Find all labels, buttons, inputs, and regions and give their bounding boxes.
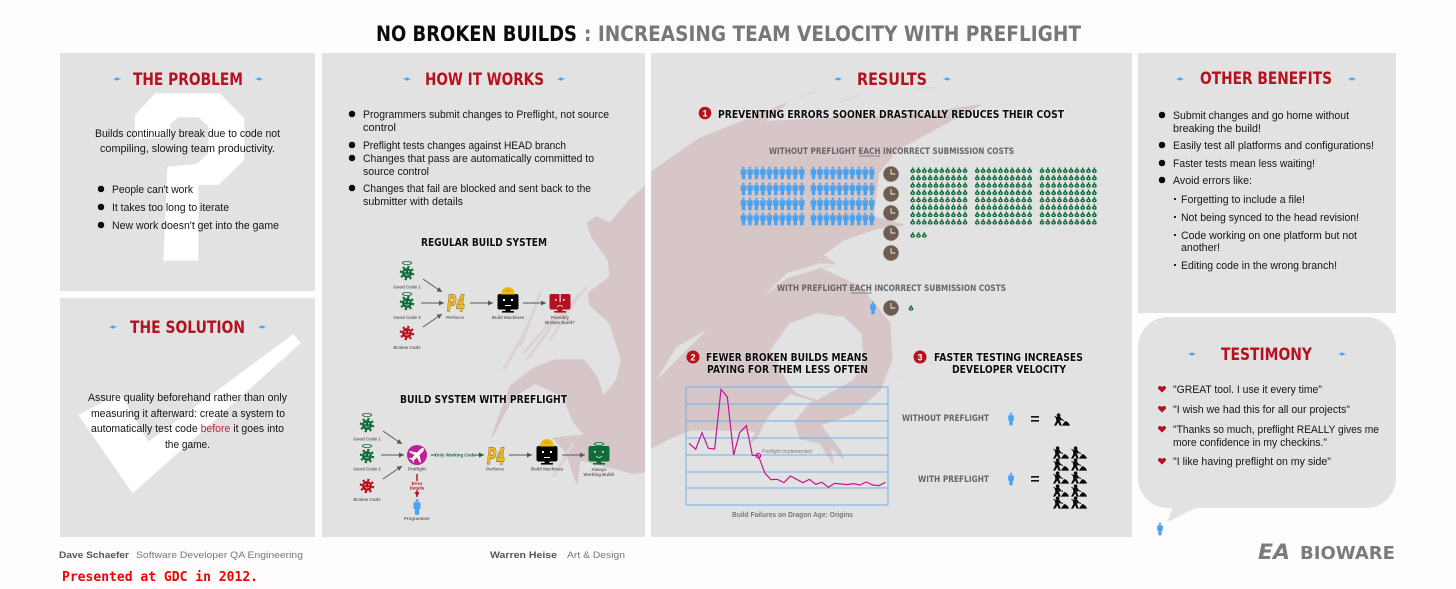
section 3 heading: [914, 350, 1083, 376]
heading: other benefits: OTHER BENEFITS: [1200, 69, 1332, 89]
dragon artwork, main body: [651, 87, 980, 464]
diagram: regular build system: Broken Code: [393, 345, 421, 350]
diagram: regular build system: Good Code 2: [393, 315, 421, 320]
panel: testimony speech bubble: [1138, 317, 1396, 535]
diagram: regular build system: P4: [447, 292, 465, 317]
text block: solution description: Assure quality beforehand rather than only: [88, 392, 287, 404]
text block: problem description: compiling, slowing team productivity.: [100, 143, 275, 155]
title: : INCREASING TEAM VELOCITY WITH PREFLIGHT: [584, 22, 1082, 46]
credit: Warren Heise: Warren Heise: [490, 550, 557, 561]
text block: solution description: measuring it afterward: create a system to: [91, 408, 285, 420]
icon: person speaking: [1157, 523, 1163, 535]
diagram: build system with preflight: Build Machines: [531, 466, 564, 472]
heading: testimony: TESTIMONY: [1221, 345, 1313, 365]
list: quotes: [1158, 384, 1379, 468]
list: quotes: "I wish we had this for all our projects": [1173, 404, 1350, 416]
list: problem effects: [98, 184, 279, 232]
list: how preflight works: submitter with details: [363, 196, 463, 208]
diagram: build system with preflight: Good Code 2: [353, 466, 381, 472]
diagram: build system with preflight: [353, 414, 615, 521]
diagram: build system with preflight: Details: [410, 486, 425, 490]
comparison: velocity without preflight: WITHOUT PREFLIGHT: [902, 414, 990, 424]
heading: the problem: THE PROBLEM: [133, 70, 243, 90]
list: problem effects: It takes too long to iterate: [112, 202, 229, 214]
list: benefits: Not being synced to the head revision!: [1181, 212, 1359, 224]
diagram: regular build system: [393, 262, 575, 350]
credit: Warren Heise: [490, 550, 625, 561]
comparison: velocity with preflight: WITH PREFLIGHT: [918, 475, 990, 485]
logos: EA and BioWare: BIOWARE: [1300, 543, 1395, 564]
panel: how it works: [322, 53, 648, 537]
diagram: build system with preflight: Working Build!: [583, 472, 615, 477]
diagram: regular build system: Perforce: [446, 315, 464, 320]
icon: question mark watermark: [135, 93, 244, 261]
title: [376, 22, 1082, 46]
title: NO BROKEN BUILDS: [376, 22, 577, 46]
comparison: velocity with preflight: [918, 446, 1087, 509]
list: quotes: "Thanks so much, preflight REALLY gives me: [1173, 424, 1379, 436]
section 1 heading: PREVENTING ERRORS SOONER DRASTICALLY REDUCES THEIR COST: [718, 108, 1064, 121]
panel: the solution: [60, 298, 315, 537]
caption: without preflight cost: WITHOUT PREFLIGHT EACH INCORRECT SUBMISSION COSTS: [769, 147, 1014, 157]
list: benefits: another!: [1181, 242, 1220, 254]
heading: results: RESULTS: [857, 70, 927, 90]
section 2 heading: [686, 350, 868, 376]
diagram: build system with preflight: Preflight: [408, 466, 426, 472]
list: problem effects: People can't work: [112, 184, 193, 196]
section 3 heading: 3: [917, 352, 923, 362]
list: how preflight works: [349, 109, 609, 208]
diagram: build system with preflight: Programmer: [404, 516, 430, 521]
heading: how it works: HOW IT WORKS: [425, 70, 544, 90]
diagram: regular build system: Build Machines: [492, 315, 525, 320]
panel: the problem: [60, 53, 315, 291]
diagram: build system with preflight: P4: [487, 445, 505, 470]
diagram: build system with preflight: Error: [412, 481, 423, 486]
diagram: build system with preflight: Good Code 1: [353, 436, 381, 442]
text block: solution description: [88, 392, 287, 451]
heading: regular build system: REGULAR BUILD SYSTEM: [421, 236, 547, 249]
chart caption: Build Failures on Dragon Age: Origins: [732, 512, 853, 519]
list: how preflight works: Programmers submit changes to Preflight, not source: [363, 109, 609, 121]
diagram: regular build system: Good Code 1: [393, 284, 421, 290]
section 2 heading: FEWER BROKEN BUILDS MEANS: [706, 351, 868, 364]
list: quotes: more confidence in my checkins.": [1173, 437, 1327, 449]
list: quotes: "I like having preflight on my side": [1173, 456, 1331, 468]
panel: results: [647, 53, 1132, 537]
list: how preflight works: control: [363, 122, 396, 134]
line chart: build failures: Preflight implemented: [762, 449, 812, 455]
diagram: build system with preflight: Perforce: [486, 466, 504, 472]
text block: problem description: [95, 128, 280, 155]
diagram: regular build system: Possibly: [551, 315, 570, 320]
diagram: build system with preflight: Only Working Code: [435, 452, 476, 458]
pictogram: hours lost: [883, 166, 899, 261]
diagram: build system with preflight: Broken Code: [353, 497, 381, 502]
section 1 heading: 1: [702, 108, 708, 118]
list: benefits: Submit changes and go home without: [1173, 110, 1349, 122]
heading: the solution: THE SOLUTION: [130, 318, 245, 338]
pictogram: cost with preflight: [870, 300, 913, 316]
list: quotes: "GREAT tool. I use it every time": [1173, 384, 1322, 396]
list: benefits: Avoid errors like:: [1173, 175, 1252, 187]
list: how preflight works: Preflight tests changes against HEAD branch: [363, 140, 566, 152]
list: benefits: Easily test all platforms and configurations!: [1173, 140, 1374, 152]
list: problem effects: New work doesn't get into the game: [112, 220, 279, 232]
list: benefits: [1159, 110, 1374, 272]
caption: with preflight cost: WITH PREFLIGHT EACH INCORRECT SUBMISSION COSTS: [777, 284, 1006, 294]
pictogram: programmers affected: [741, 167, 875, 225]
credit: Warren Heise: Art & Design: [567, 550, 625, 561]
logos: EA and BioWare: [1258, 540, 1395, 564]
section 2 heading: PAYING FOR THEM LESS OFTEN: [707, 363, 868, 376]
list: how preflight works: Changes that fail are blocked and sent back to the: [363, 183, 591, 195]
text block: solution description: the game.: [165, 439, 210, 451]
list: benefits: breaking the build!: [1173, 123, 1261, 135]
diagram: regular build system: Broken Build?: [545, 320, 575, 325]
text block: solution description: automatically test code before it goes into: [91, 423, 284, 435]
line chart: build failures: [686, 387, 888, 505]
logos: EA and BioWare: EA: [1258, 540, 1290, 564]
list: benefits: Forgetting to include a file!: [1181, 194, 1305, 206]
list: how preflight works: source control: [363, 166, 429, 178]
section 2 heading: 2: [690, 352, 696, 362]
pictogram: money lost: [910, 168, 1097, 238]
panel: other benefits: [1138, 53, 1396, 313]
credit: Dave Schaefer: [59, 550, 303, 561]
diagram: build system with preflight: Always: [591, 467, 607, 472]
credit: Dave Schaefer: Software Developer QA Engineering: [136, 550, 303, 561]
dragon artwork, left part: [491, 186, 645, 484]
list: benefits: Faster tests mean less waiting!: [1173, 158, 1315, 170]
comparison: velocity without preflight: [902, 413, 1070, 426]
text block: problem description: Builds continually break due to code not: [95, 128, 280, 140]
list: how preflight works: Changes that pass are automatically committed to: [363, 153, 594, 165]
section 3 heading: FASTER TESTING INCREASES: [934, 351, 1083, 364]
note: presented at GDC: Presented at GDC in 2012.: [62, 570, 258, 585]
heading: build system with preflight: BUILD SYSTEM WITH PREFLIGHT: [400, 393, 567, 406]
credit: Dave Schaefer: Dave Schaefer: [59, 550, 129, 561]
list: benefits: Code working on one platform but not: [1181, 230, 1357, 242]
section 3 heading: DEVELOPER VELOCITY: [952, 363, 1067, 376]
icon: check mark watermark: [78, 334, 301, 493]
list: benefits: Editing code in the wrong branch!: [1181, 260, 1337, 272]
